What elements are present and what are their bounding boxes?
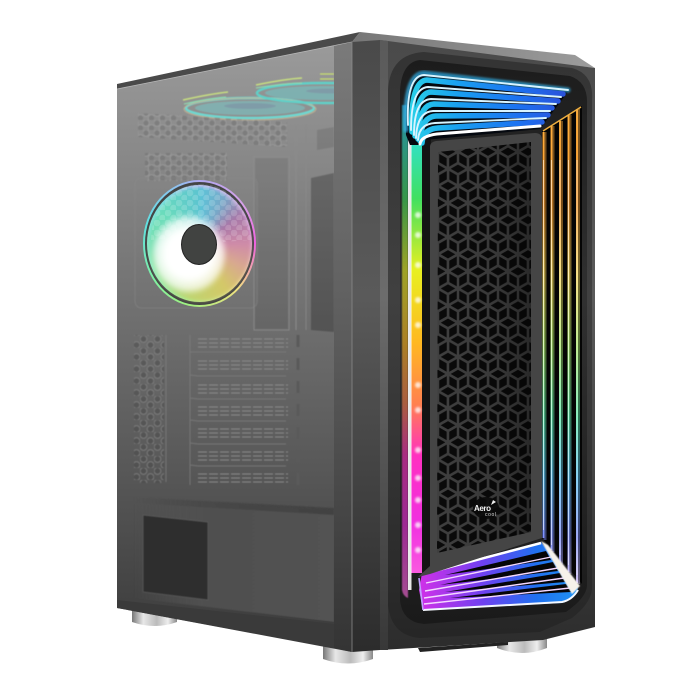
motherboard cut-out: [135, 125, 334, 332]
top edge of side panel: [117, 32, 360, 89]
bezel recess: [388, 52, 592, 638]
front panel: [352, 40, 595, 652]
top face: [352, 32, 595, 68]
panel bottom border: [117, 600, 334, 648]
left vent column: [134, 335, 164, 483]
right edge band: [334, 42, 352, 652]
PC case illustration: [117, 32, 595, 664]
left RGB strip: [402, 105, 422, 598]
logo: cool: [485, 512, 496, 518]
top fans: [182, 72, 334, 121]
top infinity mirror: [406, 71, 570, 160]
upper vent holes: [145, 153, 227, 181]
PCI slots: [166, 335, 298, 485]
bottom infinity mirror: [419, 541, 580, 610]
center mesh bezel: [418, 133, 542, 577]
center mesh: [437, 142, 531, 553]
right infinity mirror: [542, 106, 582, 584]
rear RGB fan: [143, 180, 256, 307]
logo: Aero: [474, 504, 491, 513]
top vent holes: [138, 113, 287, 147]
feet: [132, 606, 547, 664]
window interior: [134, 72, 334, 622]
logo: [473, 497, 499, 519]
PSU cut-out: [143, 515, 208, 600]
gap between strip and mesh bezel: [422, 130, 431, 575]
PSU shroud: [169, 548, 334, 622]
side glass panel: [117, 42, 352, 652]
